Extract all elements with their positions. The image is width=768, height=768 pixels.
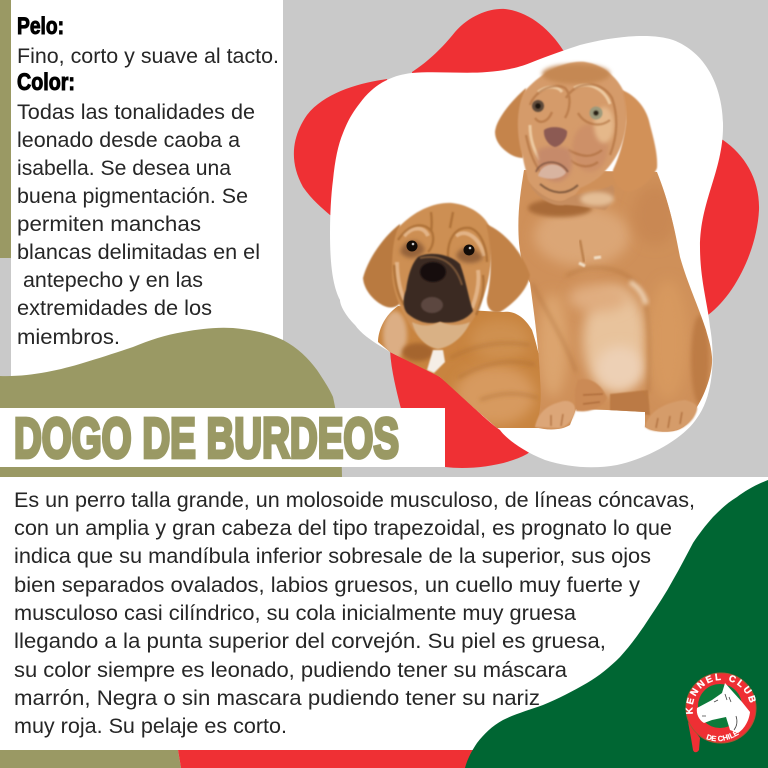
paws [535, 379, 697, 432]
logo inner circle [698, 684, 742, 728]
text block: breed description: con un amplia y gran cabeza del tipo trapezoidal, es prognato lo que [14, 517, 672, 540]
heading: pelo: Pelo: [17, 13, 64, 40]
head [518, 62, 627, 202]
wrinkle highlights [530, 85, 610, 160]
logo ring [686, 673, 756, 743]
green blob [465, 480, 768, 768]
left puppy body [378, 306, 541, 428]
text block: breed description [14, 489, 695, 738]
text: color: blancas delimitadas en el [17, 241, 260, 264]
text: color: extremidades de los [17, 297, 212, 320]
mouth [421, 297, 443, 313]
left ear [363, 224, 402, 308]
folds [532, 268, 649, 392]
bottom stripe red [178, 750, 500, 768]
logo dog head [697, 683, 750, 733]
logo dog head details [702, 694, 737, 730]
heading: color: Color: [17, 69, 75, 96]
chin and neck fold [528, 182, 614, 210]
text block: breed description: musculoso casi cilíndrico, su cola inicialmente muy gruesa [14, 602, 576, 625]
olive left strip [0, 0, 11, 258]
white text panel [11, 0, 283, 380]
muzzle [537, 146, 572, 182]
body [515, 165, 715, 435]
text block: breed description: muy roja. Su pelaje es corto. [14, 715, 287, 738]
title banner [0, 406, 445, 470]
text: color: permiten manchas [17, 213, 201, 236]
white lower section [0, 477, 768, 768]
face highlights [397, 228, 484, 308]
eyes [406, 240, 474, 256]
left puppy head [363, 203, 530, 349]
black muzzle [404, 254, 473, 323]
right ear [613, 90, 657, 192]
chin [412, 322, 470, 349]
eyes [532, 100, 602, 120]
logo leash [688, 722, 700, 752]
text: color [17, 101, 260, 349]
white chest patch [427, 350, 445, 373]
right puppy [495, 62, 715, 435]
olive wave [0, 328, 342, 477]
title: DOGO DE BURDEOS [14, 406, 399, 470]
nose [420, 262, 446, 282]
muzzle texture [420, 257, 462, 285]
logo text bottom: DE CHILE [706, 731, 739, 742]
white blob [330, 36, 723, 467]
head shading [542, 64, 610, 84]
logo: Kennel Club de Chile [686, 672, 756, 752]
skull [392, 203, 492, 347]
text: pelo: Fino, corto y suave al tacto. [17, 45, 279, 68]
red blob [294, 9, 759, 468]
wrinkles [526, 84, 616, 175]
grey background [0, 0, 768, 477]
text block: breed description: indica que su mandíbula inferior sobresale de la superior, sus ojos [14, 545, 651, 568]
text: color: leonado desde caoba a [17, 129, 240, 152]
text block: coat and color [17, 13, 279, 349]
text: color: antepecho y en las [23, 269, 203, 292]
text: color: Todas las tonalidades de [17, 101, 255, 124]
nose [544, 127, 567, 147]
text: color: miembros. [17, 326, 120, 349]
text block: breed description: llegando a la punta superior del corvejón. Su piel es gruesa, [14, 630, 606, 653]
mouth [538, 164, 566, 179]
eye sockets [400, 240, 483, 263]
logo text top: KENNEL CLUB [686, 674, 756, 714]
text: color: buena pigmentación. Se [17, 185, 248, 208]
wrinkles [394, 212, 487, 315]
illustration: two puppies [363, 62, 715, 435]
right ear [486, 224, 530, 312]
text block: breed description: marrón, Negra o sin mascara pudiendo tener su nariz [14, 687, 540, 710]
text block: breed description: bien separados ovalados, labios gruesos, un cuello muy fuerte y [14, 574, 641, 597]
text: color: isabella. Se desea una [17, 157, 231, 180]
bottom stripe olive [0, 750, 181, 768]
text block: breed description: Es un perro talla grande, un molosoide musculoso, de líneas cóncavas, [14, 489, 695, 512]
left ear [495, 88, 526, 158]
text block: breed description: su color siempre es leonado, pudiendo tener su máscara [14, 659, 567, 682]
banner background [0, 408, 445, 467]
